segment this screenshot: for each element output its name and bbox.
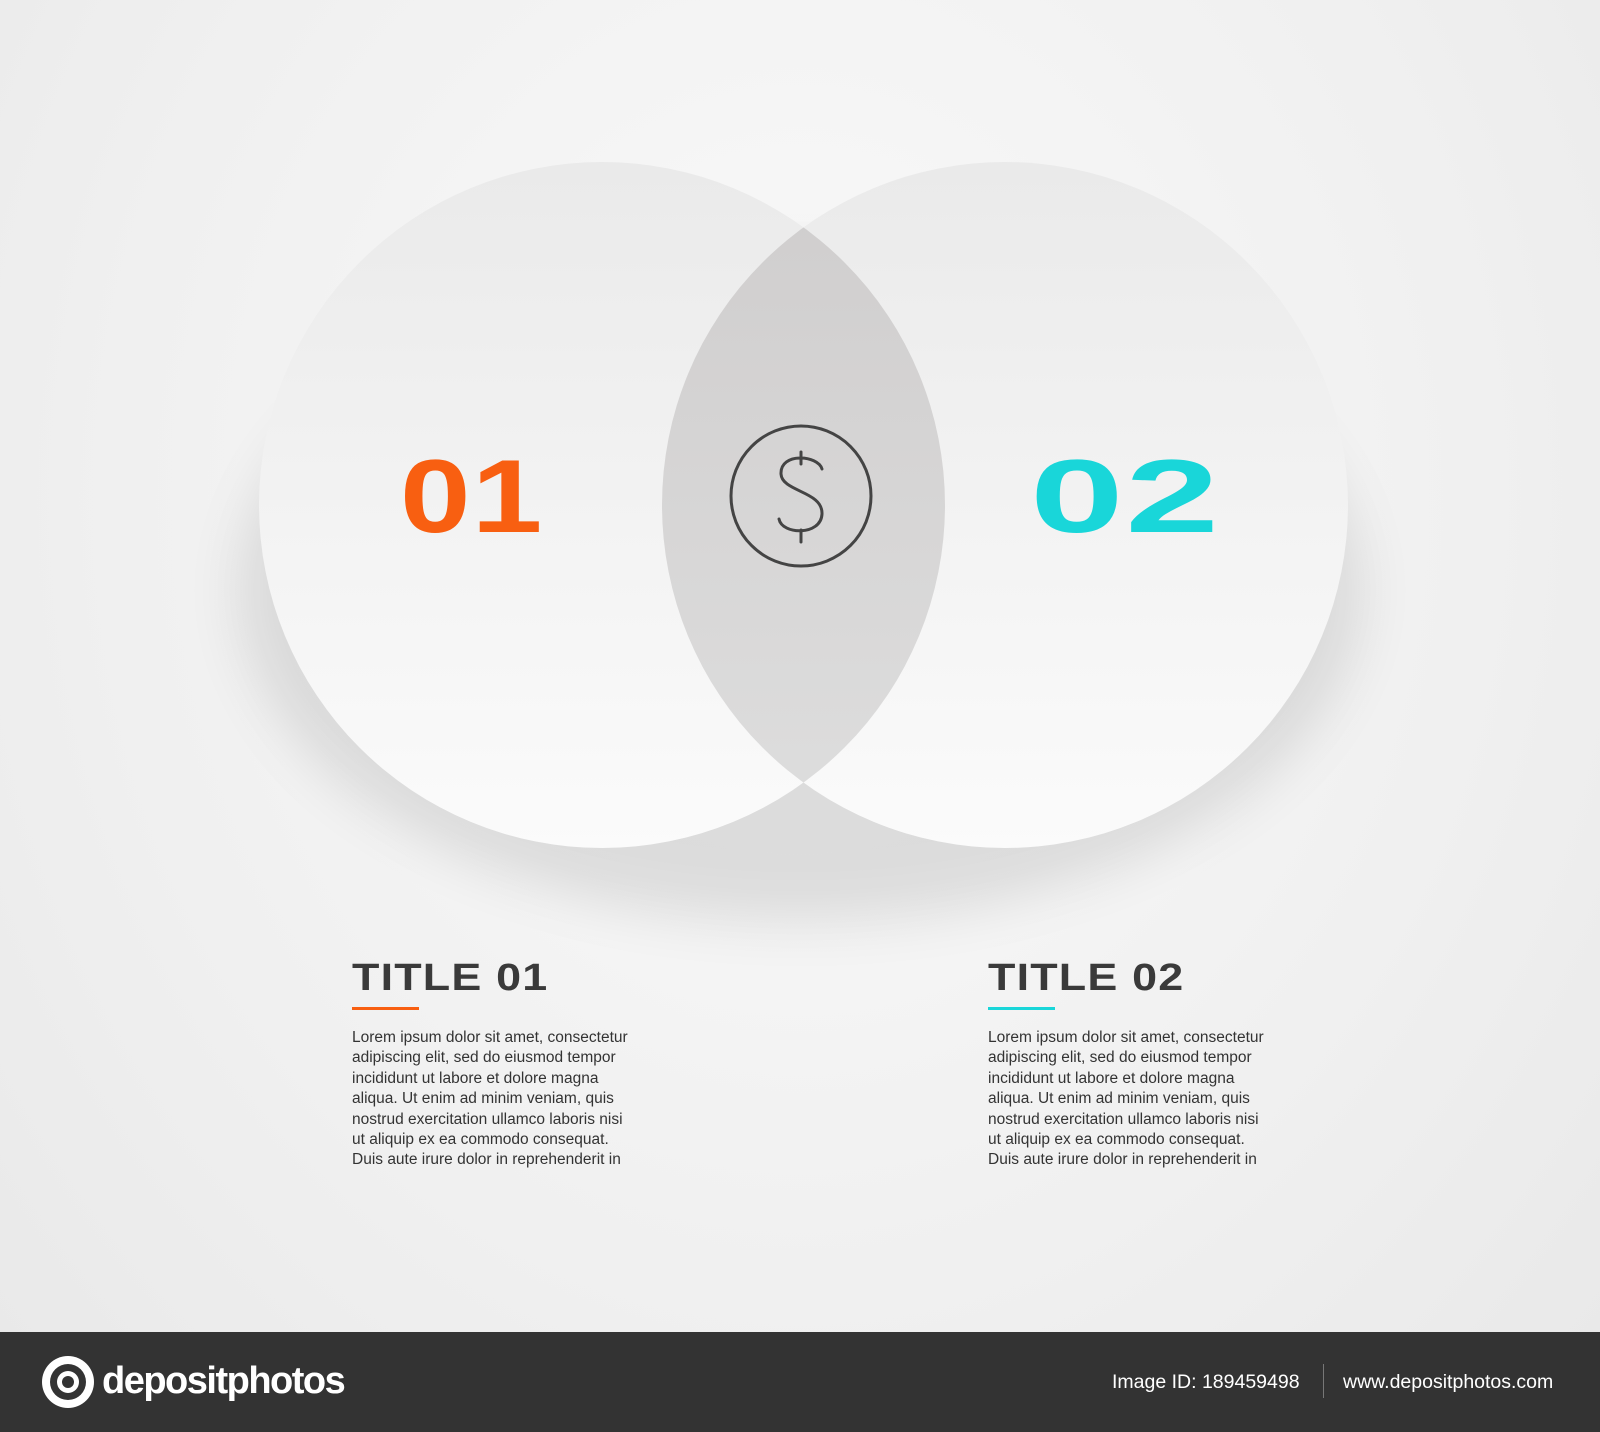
text 01: ut aliquip ex ea commodo consequat. (352, 1131, 609, 1148)
text 01: Lorem ipsum dolor sit amet, consectetur (352, 1029, 628, 1046)
underline 02 (988, 1007, 1055, 1010)
text 01: Duis aute irure dolor in reprehenderit in (352, 1151, 621, 1168)
text 02: incididunt ut labore et dolore magna (988, 1070, 1234, 1087)
text 02: nostrud exercitation ullamco laboris nisi (988, 1111, 1259, 1128)
text 02: ut aliquip ex ea commodo consequat. (988, 1131, 1245, 1148)
footer logo (42, 1356, 344, 1408)
text 02 (988, 1029, 1264, 1168)
circle 2 (662, 162, 1348, 848)
venn diagram (230, 162, 1370, 932)
text 02: aliqua. Ut enim ad minim veniam, quis (988, 1090, 1250, 1107)
underline 01 (352, 1007, 419, 1010)
title 01: TITLE 01 (352, 957, 548, 999)
footer url: www.depositphotos.com (1343, 1371, 1553, 1393)
text 01: incididunt ut labore et dolore magna (352, 1070, 598, 1087)
text 01: aliqua. Ut enim ad minim veniam, quis (352, 1090, 614, 1107)
circle 1 (259, 162, 945, 848)
footer logo: depositphotos (102, 1360, 344, 1402)
overlap lens (662, 228, 945, 782)
text 02: adipiscing elit, sed do eiusmod tempor (988, 1049, 1252, 1066)
text 01: nostrud exercitation ullamco laboris nisi (352, 1111, 623, 1128)
number 01: 01 (400, 439, 544, 555)
text 02: Lorem ipsum dolor sit amet, consectetur (988, 1029, 1264, 1046)
text 01 (352, 1029, 628, 1168)
text 01: adipiscing elit, sed do eiusmod tempor (352, 1049, 616, 1066)
footer image id: Image ID: 189459498 (1112, 1371, 1300, 1393)
title 02: TITLE 02 (988, 957, 1184, 999)
number 02: 02 (1030, 439, 1221, 555)
icon: dollar (731, 426, 871, 566)
text 02: Duis aute irure dolor in reprehenderit in (988, 1151, 1257, 1168)
footer bar (0, 1332, 1600, 1432)
